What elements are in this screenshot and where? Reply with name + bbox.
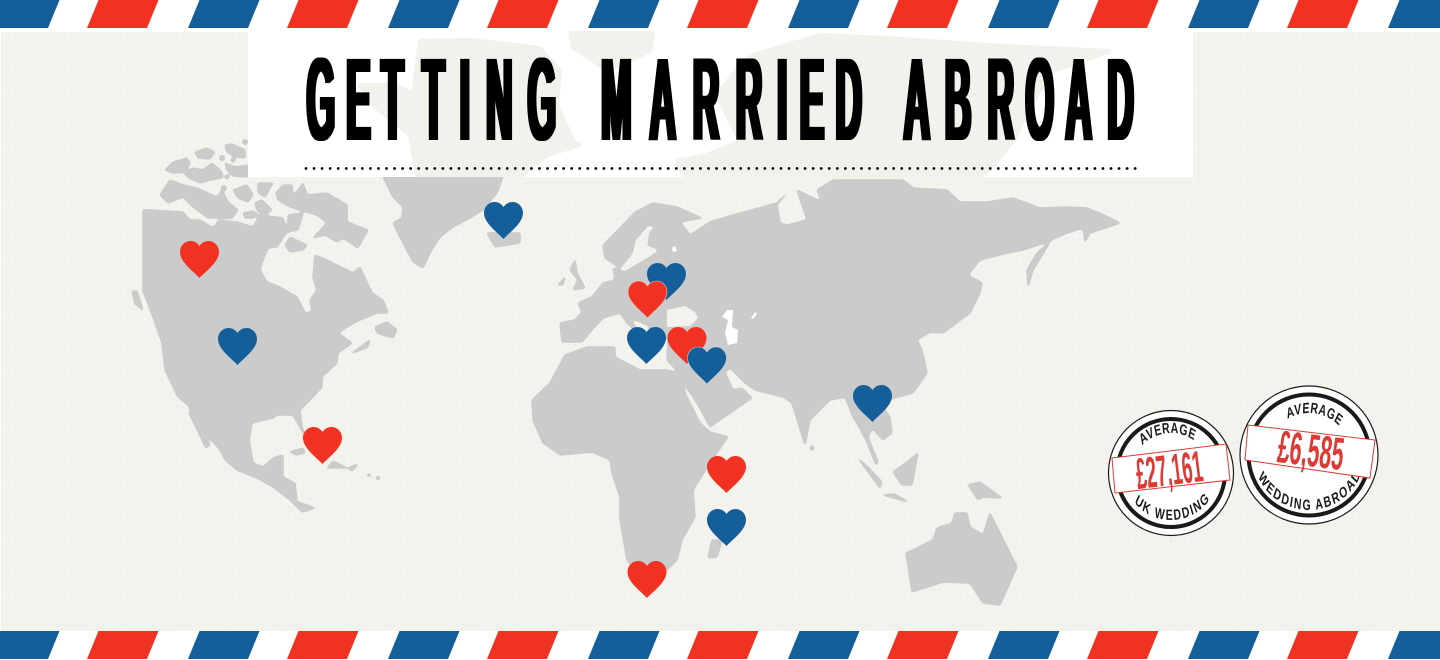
heart: blue, Indian Ocean	[707, 509, 746, 546]
Madagascar	[708, 540, 722, 558]
heart: red, Canada	[180, 241, 219, 278]
Greenland	[383, 177, 503, 268]
Britain and Ireland	[558, 260, 585, 290]
heart: red, South Africa	[628, 561, 666, 598]
hearts	[180, 202, 892, 598]
title: GETTING MARRIED ABROAD	[307, 33, 1134, 166]
heart: red, East Africa	[707, 456, 746, 493]
stamp: average UK wedding	[1108, 410, 1234, 536]
stamp: average wedding abroad: £6,585	[1275, 420, 1347, 480]
heart: blue, Middle East	[688, 347, 726, 384]
Southeast Asia islands	[810, 242, 1050, 502]
inland seas	[672, 246, 757, 345]
heart: red, central Europe	[628, 281, 667, 318]
heart: red, Turkey	[668, 327, 706, 364]
North America	[143, 210, 388, 512]
heart: blue, Thailand	[853, 385, 892, 422]
heart: red, Caribbean	[303, 427, 342, 464]
title panel	[248, 32, 1193, 177]
stamp: average UK wedding: UK WEDDING	[1136, 494, 1208, 520]
Australia	[906, 513, 1017, 605]
airmail stripe: top	[0, 0, 1440, 28]
stamp: average UK wedding: £27,161	[1133, 442, 1205, 499]
stamp: average wedding abroad: WEDDING ABROAD	[1259, 470, 1360, 510]
faint map behind title	[360, 33, 1110, 175]
Black Sea	[667, 306, 698, 327]
Eurasia	[560, 180, 1120, 465]
Africa	[532, 347, 728, 585]
heart: blue, Iceland	[484, 202, 523, 239]
stamp: average wedding abroad	[1239, 385, 1379, 525]
heart: blue, eastern Europe	[647, 263, 686, 300]
airmail stripe: bottom	[0, 631, 1440, 659]
stamp: average UK wedding: AVERAGE	[1140, 422, 1196, 445]
heart: blue, USA	[218, 328, 257, 365]
heart: blue, Mediterranean	[627, 327, 666, 364]
Iceland	[487, 233, 520, 247]
world map	[132, 140, 1120, 605]
stamp: average wedding abroad: AVERAGE	[1288, 402, 1344, 426]
dotted rule	[306, 167, 1136, 170]
Arctic and Atlantic islands	[132, 140, 397, 480]
